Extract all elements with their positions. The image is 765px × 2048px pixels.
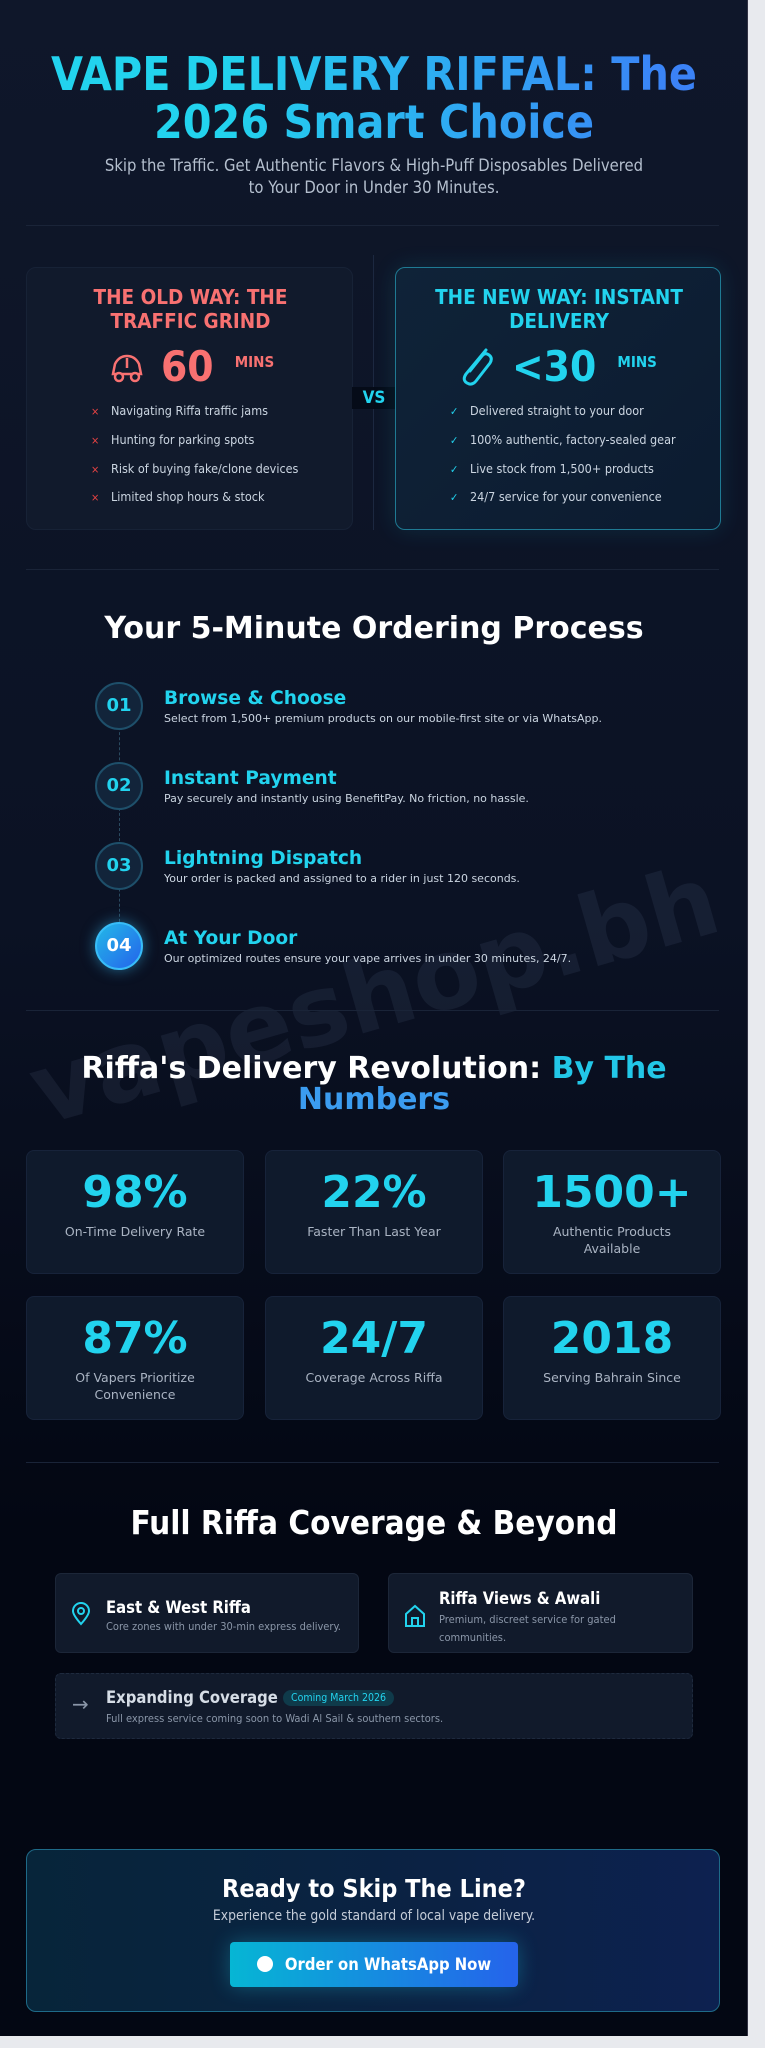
cta panel <box>26 1849 720 2012</box>
step 1 <box>95 682 602 730</box>
stat 87% <box>26 1296 244 1420</box>
coverage: riffa views: Premium, discreet service for gated communities. <box>439 1613 616 1644</box>
subtitle <box>105 156 643 197</box>
heading: by the numbers: Riffa's Delivery Revolution: By The <box>81 1051 667 1086</box>
steps <box>86 682 602 978</box>
panel: new way <box>395 267 721 530</box>
heading: ordering process: Your 5-Minute Ordering Process <box>104 611 644 646</box>
title: VAPE DELIVERY RIFFAL: The <box>51 47 697 101</box>
icon: pin <box>72 1602 90 1626</box>
subtitle: to Your Door in Under 30 Minutes. <box>249 178 499 197</box>
step 2: 02 <box>106 775 132 796</box>
stat 24/7 <box>265 1296 483 1420</box>
coverage: expanding: Expanding Coverage Coming March 2026 <box>106 1688 386 1707</box>
heading: old way: THE OLD WAY: THE <box>94 285 287 309</box>
stat 87%: 87% <box>82 1313 188 1364</box>
icon: car <box>112 354 142 382</box>
step 3: 03 <box>106 855 132 876</box>
icon: arrow: → <box>72 1692 89 1716</box>
step 4: 04 <box>106 935 132 956</box>
panel: new way: ✓ <box>450 405 458 418</box>
panel: old way: × <box>91 491 99 504</box>
coverage: east & west riffa: East & West Riffa <box>106 1598 251 1617</box>
step 1: 01 <box>106 695 132 716</box>
text: At Your Door <box>164 928 297 949</box>
stat 24/7: Coverage Across Riffa <box>305 1370 442 1385</box>
panel: new way: ✓ <box>450 463 458 476</box>
heading: new way <box>435 285 683 333</box>
text: Pay securely and instantly using BenefitPay. No friction, no hassle. <box>164 792 529 805</box>
panel: old way: × <box>91 463 99 476</box>
stat 2018 <box>503 1296 721 1420</box>
text: Select from 1,500+ premium products on our mobile-first site or via WhatsApp. <box>164 712 602 725</box>
vs badge: VS <box>363 388 385 408</box>
stat 1500+: Authentic Products <box>553 1224 671 1239</box>
stat 98%: On-Time Delivery Rate <box>65 1224 205 1239</box>
panel: new way: ✓ <box>450 491 458 504</box>
heading: old way <box>94 285 287 333</box>
cta heading: Ready to Skip The Line? <box>222 1874 526 1903</box>
stat 1500+: Available <box>584 1241 640 1256</box>
coverage: riffa views: Riffa Views & Awali <box>439 1589 600 1608</box>
heading: coverage: Full Riffa Coverage & Beyond <box>130 1503 618 1542</box>
stat: <30 mins: <30 MINS <box>512 342 657 391</box>
coverage: riffa views <box>388 1573 693 1653</box>
panel: old way: × <box>91 434 99 447</box>
list: old way <box>91 403 298 504</box>
panel: new way: Delivered straight to your door <box>470 403 644 418</box>
vs badge <box>352 387 396 409</box>
list: new way <box>450 403 676 504</box>
stat 24/7: 24/7 <box>320 1313 428 1364</box>
title <box>0 50 748 146</box>
stat 98%: 98% <box>82 1167 188 1218</box>
stats grid <box>26 1150 721 1420</box>
heading: new way: THE NEW WAY: INSTANT <box>435 285 683 309</box>
stat 2018: Serving Bahrain Since <box>543 1370 681 1385</box>
panel: new way: Live stock from 1,500+ products <box>470 461 654 476</box>
stat 1500+: 1500+ <box>532 1167 692 1218</box>
title: 2026 Smart Choice <box>154 95 594 149</box>
cta sub: Experience the gold standard of local vape delivery. <box>213 1908 535 1924</box>
step 2 <box>95 762 529 810</box>
panel: new way: 24/7 service for your convenience <box>470 489 662 504</box>
text: Instant Payment <box>164 768 337 789</box>
panel: old way: × <box>91 405 99 418</box>
icon: house <box>405 1604 425 1627</box>
stat 1500+ <box>503 1150 721 1274</box>
panel: old way <box>26 267 353 530</box>
stat: 60 mins: 60 MINS <box>161 342 274 391</box>
panel: old way: Limited shop hours & stock <box>111 489 264 504</box>
heading: by the numbers: Numbers <box>298 1082 450 1117</box>
stat 22%: 22% <box>321 1167 427 1218</box>
coverage: expanding: Full express service coming soon to Wadi Al Sail & southern sectors. <box>106 1712 443 1725</box>
step 3 <box>95 842 520 890</box>
stat 22% <box>265 1150 483 1274</box>
stat 87%: Convenience <box>95 1387 175 1402</box>
panel: old way: Risk of buying fake/clone devices <box>111 461 298 476</box>
panel: new way: ✓ <box>450 434 458 447</box>
heading: old way: TRAFFIC GRIND <box>110 309 271 333</box>
icon: paperclip <box>462 348 493 386</box>
stat 87%: Of Vapers Prioritize <box>75 1370 195 1385</box>
stat 22%: Faster Than Last Year <box>307 1224 441 1239</box>
panel: old way: Hunting for parking spots <box>111 432 254 447</box>
watermark: vapeshop.bh <box>18 843 731 1148</box>
text: Your order is packed and assigned to a rider in just 120 seconds. <box>164 872 520 885</box>
heading: new way: DELIVERY <box>509 309 609 333</box>
subtitle: Skip the Traffic. Get Authentic Flavors & High-Puff Disposables Delivered <box>105 156 643 175</box>
text: Browse & Choose <box>164 688 346 709</box>
text: Lightning Dispatch <box>164 848 362 869</box>
coverage: east & west riffa <box>55 1573 359 1653</box>
coverage: east & west riffa: Core zones with under 30-min express delivery. <box>106 1620 341 1633</box>
heading: by the numbers <box>81 1051 667 1117</box>
text: Our optimized routes ensure your vape arrives in under 30 minutes, 24/7. <box>164 952 571 965</box>
coverage: expanding <box>55 1673 693 1739</box>
panel: old way: Navigating Riffa traffic jams <box>111 403 268 418</box>
panel: new way: 100% authentic, factory-sealed gear <box>470 432 676 447</box>
button: Order on WhatsApp Now <box>285 1955 491 1974</box>
stat 2018: 2018 <box>551 1313 673 1364</box>
button <box>230 1942 518 1987</box>
step 4 <box>86 914 571 978</box>
stat 98% <box>26 1150 244 1274</box>
